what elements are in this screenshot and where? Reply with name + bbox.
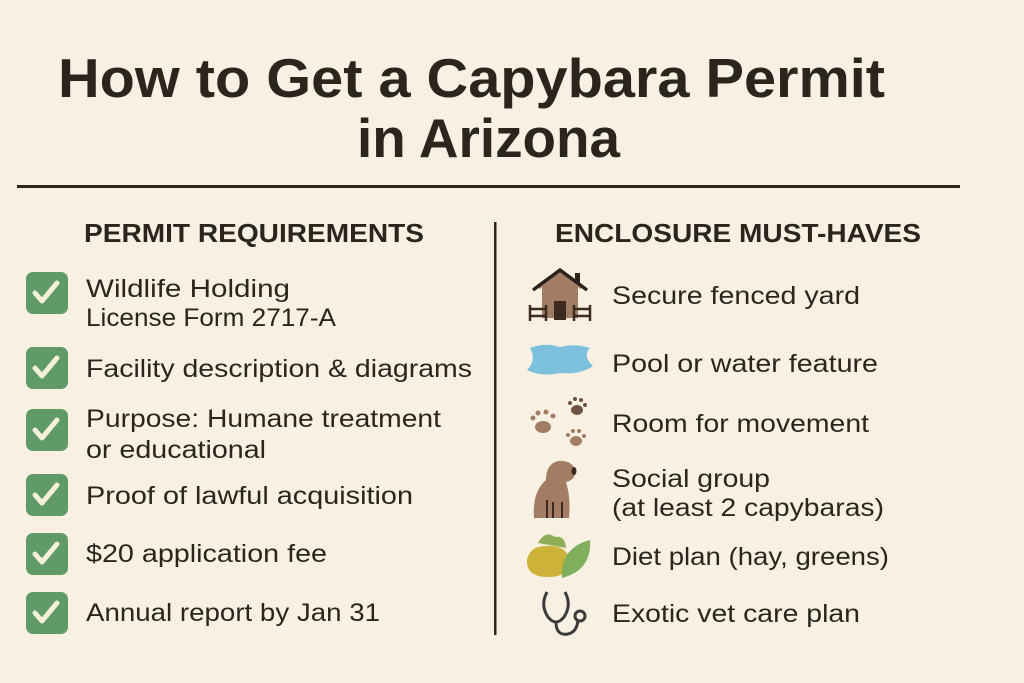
- panel: enclosure must-haves: [527, 218, 921, 634]
- item: facility: [26, 347, 472, 389]
- item: diet icon: [527, 535, 889, 578]
- heading: permit requirements: PERMIT REQUIREMENTS: [84, 218, 424, 248]
- item: paw prints icon: Room for movement: [612, 410, 869, 438]
- item: facility: Facility description & diagrams: [86, 355, 472, 383]
- title: How to Get a Capybara Permit: [58, 47, 885, 109]
- item: paw prints icon: [530, 397, 869, 446]
- item: fee: [26, 533, 327, 575]
- title: in Arizona: [357, 107, 620, 169]
- item: proof: Proof of lawful acquisition: [86, 482, 413, 510]
- item: purpose: [26, 405, 441, 464]
- heading: enclosure: ENCLOSURE MUST-HAVES: [555, 218, 921, 248]
- item: wildlife license: License Form 2717-A: [86, 304, 336, 332]
- item: purpose: Purpose: Humane treatment: [86, 405, 441, 433]
- item: pool icon: [527, 345, 878, 378]
- item: capybara icon: (at least 2 capybaras): [612, 494, 884, 522]
- item: wildlife license: [26, 272, 336, 332]
- panel: permit requirements: [26, 218, 472, 634]
- item: annual report: [26, 592, 380, 634]
- item: fenced yard with house icon: [530, 270, 860, 321]
- item: annual report: Annual report by Jan 31: [86, 599, 380, 627]
- item: purpose: or educational: [86, 436, 266, 464]
- item: diet icon: Diet plan (hay, greens): [612, 543, 889, 571]
- item: proof: [26, 474, 413, 516]
- item: stethoscope icon: Exotic vet care plan: [612, 600, 860, 628]
- item: wildlife license: Wildlife Holding: [86, 275, 290, 303]
- item: fee: $20 application fee: [86, 540, 327, 568]
- item: fenced yard with house icon: Secure fenced yard: [612, 282, 860, 310]
- item: capybara icon: Social group: [612, 465, 770, 493]
- item: capybara icon: [534, 461, 884, 522]
- item: pool icon: Pool or water feature: [612, 350, 878, 378]
- title: [58, 47, 885, 169]
- item: stethoscope icon: [544, 592, 860, 634]
